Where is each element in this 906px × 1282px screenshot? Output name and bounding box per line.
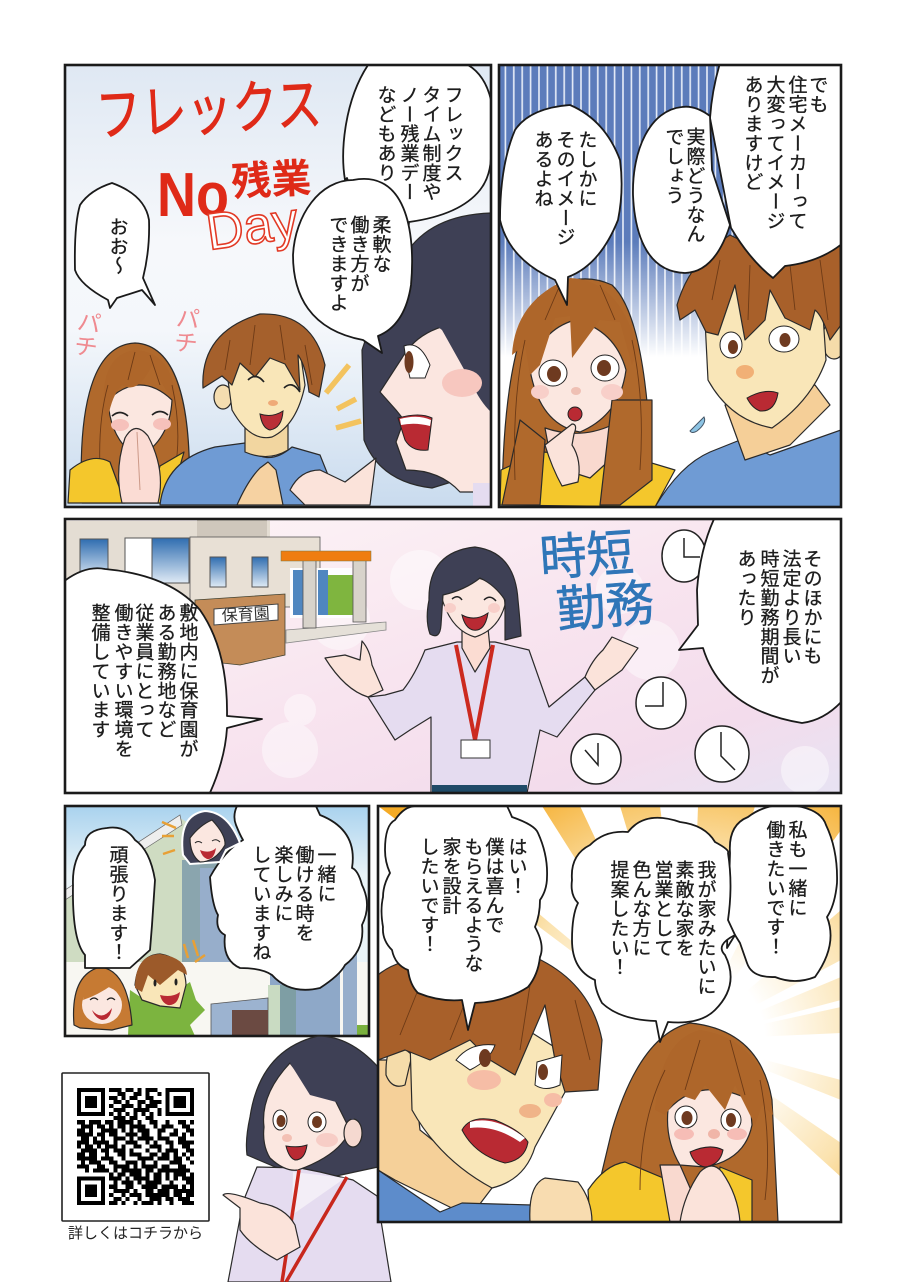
speech text: house maker: 住宅メーカーって: [786, 75, 807, 230]
speech text: flex time: タイム制度や: [420, 85, 441, 201]
QR code: [77, 1090, 194, 1203]
speech text: propose homes: 営業として: [652, 860, 673, 957]
panel: dreams: [378, 805, 841, 1222]
speech text: oo: おお～: [106, 217, 128, 275]
speech text: that image: そのイメージ: [554, 130, 574, 246]
bokeh: [262, 550, 829, 794]
panel frame 5: [378, 806, 841, 1222]
speech text: flexible work: 柔軟な: [370, 215, 391, 273]
speech bubble: that image: [500, 105, 622, 305]
speech bubble: design homes: [382, 806, 547, 1030]
speech bubble: statutory: [679, 519, 843, 723]
speech text: house maker: 大変ってイメージ: [764, 75, 785, 230]
speech bubble: really: [633, 107, 730, 273]
speech text: nursery: 働きやすい環境を: [112, 603, 133, 758]
speech text: nursery: 敷地内に保育園が: [176, 603, 198, 758]
speech text: nursery: 従業員にとって: [132, 603, 154, 739]
character: girl excited: [588, 1023, 778, 1222]
speech text: nursery: ある勤務地など: [154, 603, 176, 739]
speech text: propose homes: [608, 860, 716, 996]
speech text: looking forward: 一緒に: [314, 845, 336, 903]
speech text: design homes: はい！: [506, 837, 526, 895]
panel frame 1: [65, 65, 491, 507]
speech text: house maker: ありますけど: [742, 75, 762, 191]
office building: [65, 815, 369, 1036]
heading: shorter hours: [542, 530, 653, 630]
sound effect: clap right: パチ: [168, 305, 199, 355]
speech text: propose homes: 色んな方に: [630, 860, 651, 957]
heading: shorter hours: 時短: [538, 525, 636, 587]
character: boy laughing: [160, 314, 340, 505]
speech text: really: 実際どうなん: [684, 127, 705, 243]
sunburst rays: [378, 806, 841, 1177]
speech text: design homes: [418, 837, 526, 973]
speech bubble: nursery: [63, 568, 262, 795]
sound effect: clap left: パチ: [68, 308, 101, 359]
clocks: [571, 530, 749, 784]
panel: flex time: [65, 65, 493, 507]
speech text: flexible work: 働き方が: [348, 215, 369, 293]
speech text: really: でしょう: [662, 127, 684, 205]
speech bubble: flexible work: [293, 179, 412, 353]
speech text: flex time: [374, 85, 462, 201]
sky background: [65, 806, 369, 1036]
speech bubble: oo: [75, 183, 155, 308]
speech text: looking forward: [250, 845, 336, 961]
heading: no overtime: No: [157, 161, 229, 230]
speech text: design homes: 家を設計: [440, 837, 461, 915]
head: girl: [74, 967, 132, 1030]
panel background: [65, 65, 491, 507]
speech text: work together: 働きたいです！: [764, 820, 785, 956]
QR card: [62, 1073, 209, 1221]
character: boy worried: [655, 235, 846, 507]
speech text: design homes: 僕は喜んで: [482, 837, 504, 934]
speech bubble: propose homes: [572, 818, 735, 1042]
speech text: propose homes: 提案したい！: [608, 860, 629, 976]
speech text: that image: たしかに: [576, 130, 596, 208]
speech bubble: do my best: [73, 828, 155, 968]
panel: shorter hours: [63, 519, 843, 795]
panel frame 3: [65, 519, 841, 793]
panel: reality question: [499, 63, 846, 507]
speech text: propose homes: 素敵な家を: [672, 860, 694, 957]
speech text: that image: あるよね: [532, 130, 552, 208]
panel: looking forward: [65, 804, 369, 1036]
emphasis marks: boy: [184, 940, 205, 962]
speech text: statutory: あったり: [734, 549, 756, 627]
sweat drop: [690, 417, 705, 432]
speech text: house maker: [742, 75, 828, 230]
speech text: work together: [764, 820, 807, 956]
speech text: looking forward: 楽しみに: [272, 845, 293, 923]
panel background: [65, 519, 841, 793]
head: woman: [182, 811, 240, 864]
character: boy determined: [378, 955, 602, 1222]
sign text: 保育園: [221, 605, 270, 625]
speech text: design homes: もらえるような: [462, 837, 482, 973]
speech text: statutory: 法定より長い: [780, 549, 801, 665]
speech bubble: image of house maker: [710, 63, 843, 278]
speech text: flex time: などもあり: [374, 85, 396, 182]
nursery building: [65, 519, 386, 665]
speech bubble: work together: [727, 805, 837, 981]
tree: [128, 982, 205, 1036]
speech text: statutory: [734, 549, 822, 685]
character: woman speaking: [290, 213, 493, 507]
speech text: flexible work: [326, 215, 391, 312]
speech text: statutory: そのほかにも: [800, 549, 822, 665]
emphasis marks: woman: [162, 822, 176, 854]
speech text: work together: 私も一緒に: [786, 820, 807, 917]
head: boy: [135, 954, 187, 1008]
speech text: nursery: 整備しています: [88, 603, 110, 739]
striped background: [500, 66, 736, 351]
character: pointing woman: [223, 1036, 391, 1282]
heading: flex: フレックス: [94, 72, 323, 149]
panel frame 4: [65, 806, 369, 1036]
speech bubble: flex time: [343, 65, 491, 233]
speech text: house maker: でも: [806, 75, 828, 114]
speech text: that image: [532, 130, 596, 246]
panel frame 2: [499, 65, 841, 507]
heading: day: Day: [203, 192, 302, 262]
speech text: flex time: フレックス: [442, 85, 462, 182]
speech text: looking forward: していますね: [250, 845, 270, 961]
speech text: do my best: 頑張ります！: [106, 845, 128, 961]
QR caption: 詳しくはコチラから: [68, 1225, 203, 1242]
speech bubble: looking forward: [210, 804, 367, 990]
emphasis marks: [326, 365, 361, 428]
speech text: flex time: ノー残業デー: [398, 85, 419, 201]
heading: shorter hours: 勤務: [554, 575, 657, 639]
character: girl thinking: [500, 278, 675, 507]
speech text: looking forward: 働ける時を: [292, 845, 314, 942]
speech text: propose homes: 我が家みたいに: [694, 860, 716, 996]
speech text: flexible work: できますよ: [326, 215, 348, 312]
speech text: really: [662, 127, 705, 243]
panel background: [378, 806, 841, 1222]
speech text: design homes: したいです！: [418, 837, 438, 953]
speech text: nursery: [88, 603, 198, 758]
heading: zangyo: 残業: [230, 157, 312, 205]
character: woman with lanyard: [325, 547, 638, 793]
speech text: statutory: 時短勤務期間が: [758, 549, 779, 685]
character: girl laughing: [68, 343, 189, 503]
